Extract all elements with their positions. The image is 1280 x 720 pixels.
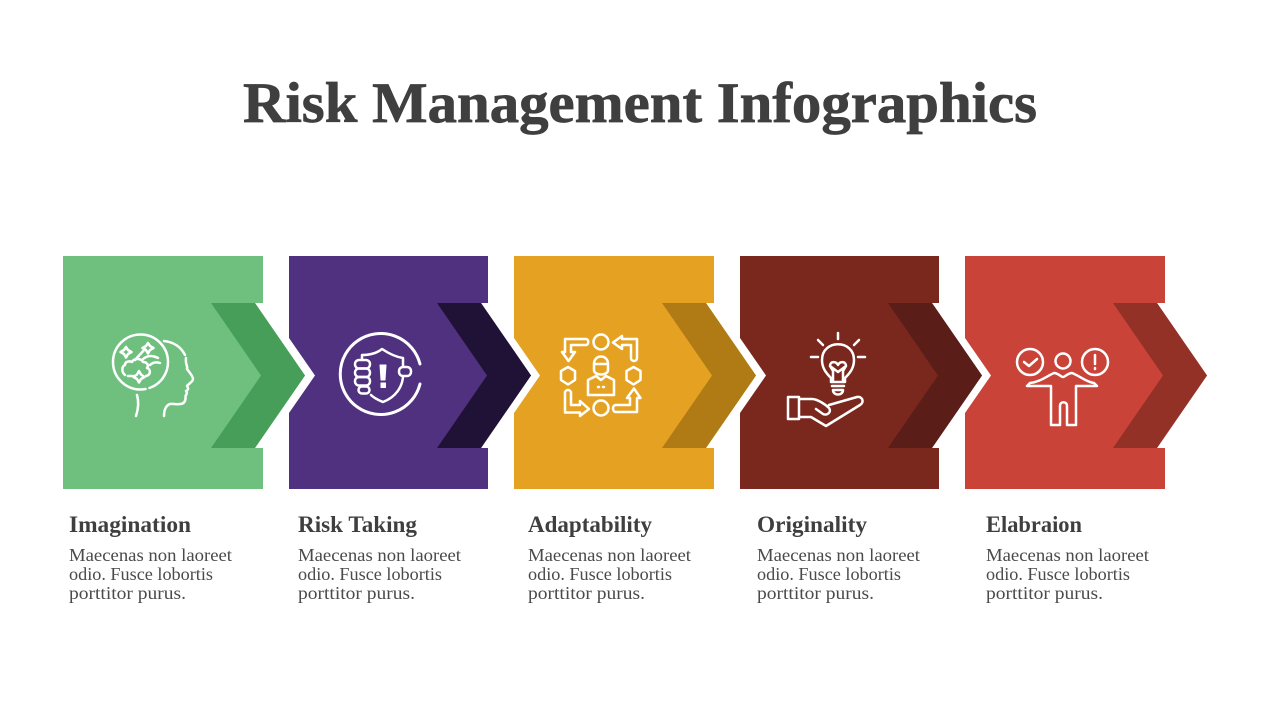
caption: elabraion: porttitor purus.: [986, 583, 1103, 603]
caption: elabraion: Maecenas non laoreet: [986, 545, 1149, 565]
chevron: risk taking: [437, 303, 531, 448]
caption: adaptability: [528, 512, 691, 603]
chevron: originality: [888, 303, 982, 448]
panel: imagination: [63, 256, 305, 489]
caption: originality: porttitor purus.: [757, 583, 874, 603]
caption: adaptability: Maecenas non laoreet: [528, 545, 691, 565]
icon: person weighing options: [1017, 349, 1108, 425]
panel: originality: [740, 256, 982, 489]
icon: head with idea cloud: [113, 334, 193, 416]
icon: people and process cycle: [561, 334, 640, 416]
panel: elabraion: [965, 256, 1207, 489]
caption: elabraion: odio. Fusce lobortis: [986, 564, 1130, 584]
chevron: elabraion: [1113, 303, 1207, 448]
panel: adaptability: [514, 256, 756, 489]
chevron: imagination: [211, 303, 305, 448]
caption: elabraion: Elabraion: [986, 512, 1082, 537]
caption: risk taking: odio. Fusce lobortis: [298, 564, 442, 584]
caption: imagination: Maecenas non laoreet: [69, 545, 232, 565]
block: originality: [740, 256, 982, 489]
title: Risk Management Infographics: [243, 72, 1037, 135]
caption: originality: Originality: [757, 512, 867, 537]
chevron: adaptability: [662, 303, 756, 448]
caption: risk taking: Maecenas non laoreet: [298, 545, 461, 565]
block: adaptability: [514, 256, 756, 489]
block: imagination: [63, 256, 305, 489]
panel: risk taking: [289, 256, 531, 489]
caption: originality: Maecenas non laoreet: [757, 545, 920, 565]
caption: originality: odio. Fusce lobortis: [757, 564, 901, 584]
caption: imagination: [69, 512, 232, 603]
caption: adaptability: porttitor purus.: [528, 583, 645, 603]
caption: elabraion: [986, 512, 1149, 603]
caption: risk taking: [298, 512, 461, 603]
caption: risk taking: porttitor purus.: [298, 583, 415, 603]
caption: imagination: Imagination: [69, 512, 191, 537]
block: risk taking: [289, 256, 531, 489]
caption: originality: [757, 512, 920, 603]
icon: light bulb over hand: [788, 333, 865, 426]
caption: imagination: porttitor purus.: [69, 583, 186, 603]
block: elabraion: [965, 256, 1207, 489]
caption: imagination: odio. Fusce lobortis: [69, 564, 213, 584]
icon: shield in hand: [340, 333, 420, 414]
caption: risk taking: Risk Taking: [298, 512, 418, 537]
caption: adaptability: Adaptability: [528, 512, 652, 537]
caption: adaptability: odio. Fusce lobortis: [528, 564, 672, 584]
